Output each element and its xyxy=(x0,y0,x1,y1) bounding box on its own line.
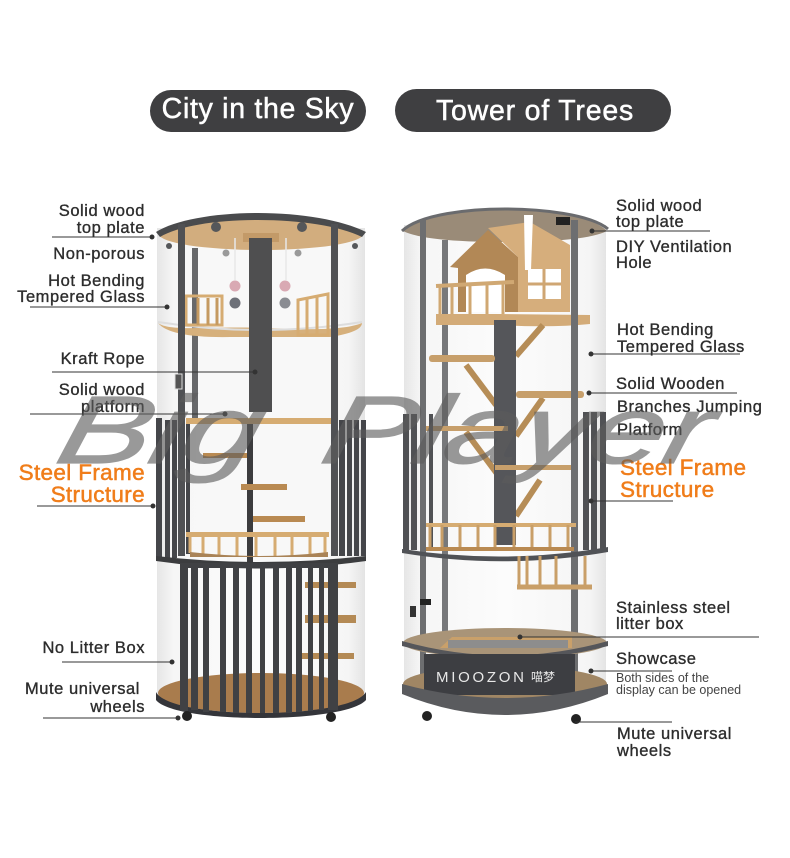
litter box tray xyxy=(402,628,608,660)
callout: ventilation: Hole xyxy=(616,254,652,272)
callout: top plate xyxy=(590,197,710,234)
callout: wheels xyxy=(25,680,180,720)
callout: top plate: top plate xyxy=(77,219,145,237)
frame ring xyxy=(402,547,608,561)
base xyxy=(156,673,366,718)
callout: showcase: Showcase xyxy=(616,650,697,668)
callout: branches: Platform xyxy=(617,421,683,439)
callout: no litter box: No Litter Box xyxy=(42,639,145,657)
brand name: MIOOZON xyxy=(436,669,524,686)
callout: platform: platform xyxy=(81,398,145,416)
callout: wheels: Mute universal xyxy=(617,725,732,743)
callout: wheels: wheels xyxy=(89,698,145,716)
watermark: Big xyxy=(48,376,276,484)
title pill: City in the Sky: City in the Sky xyxy=(162,93,354,125)
product: City in the Sky cat tower xyxy=(156,213,366,722)
callout: non-porous glass: Hot Bending xyxy=(48,272,145,290)
door posts xyxy=(178,224,185,556)
upper platform xyxy=(158,294,362,337)
wheels xyxy=(182,711,336,722)
top plate xyxy=(156,213,366,256)
callout: branches xyxy=(586,375,762,439)
callout: no litter box xyxy=(42,639,174,664)
middle band xyxy=(156,556,366,568)
kraft rope post xyxy=(249,238,272,412)
callout: top plate xyxy=(52,202,154,240)
wooden railing xyxy=(426,523,576,551)
title pill: Tower of Trees xyxy=(395,89,671,132)
callout: wheels: Mute universal xyxy=(25,680,140,698)
hanging perch xyxy=(517,556,592,587)
watermark: Player xyxy=(313,377,731,484)
branch platforms xyxy=(425,355,584,470)
callout: steel frame: Structure xyxy=(620,477,714,502)
wheels xyxy=(422,711,581,724)
callout: ventilation: DIY Ventilation xyxy=(616,238,732,256)
callout: litter box xyxy=(518,599,759,640)
callout: litter box: Stainless steel xyxy=(616,599,731,617)
watermark xyxy=(48,376,731,484)
right callouts xyxy=(518,197,762,760)
top plate xyxy=(402,209,608,242)
wooden cat house xyxy=(436,215,590,326)
callout: branches: Solid Wooden xyxy=(616,375,725,393)
showcase base: 喵梦 xyxy=(531,670,555,684)
callout: wheels: wheels xyxy=(616,742,672,760)
callout: non-porous glass: Non-porous xyxy=(53,245,145,263)
product: Tower of Trees cat tower xyxy=(402,209,608,724)
lower post and steps xyxy=(186,418,331,564)
callout: steel frame xyxy=(19,460,156,508)
back posts xyxy=(192,248,198,418)
callout: platform xyxy=(30,381,228,416)
title pill: City in the Sky xyxy=(150,90,366,132)
tree trunk post xyxy=(494,320,516,545)
callout: top plate: Solid wood xyxy=(59,202,145,220)
left callouts xyxy=(17,202,258,720)
callout: kraft rope: Kraft Rope xyxy=(61,350,145,368)
callout: non-porous glass xyxy=(17,245,170,310)
steel frame bars xyxy=(403,412,606,550)
lower cage bars xyxy=(180,563,338,713)
callout: glass: Hot Bending xyxy=(617,321,714,339)
callout: glass: Tempered Glass xyxy=(617,338,745,356)
glass cylinder xyxy=(404,225,606,695)
callout: branches: Branches Jumping xyxy=(617,398,762,416)
door lock xyxy=(410,599,431,617)
callout: showcase xyxy=(588,650,741,697)
callout: litter box: litter box xyxy=(616,615,684,633)
showcase base xyxy=(402,654,608,715)
callout: steel frame xyxy=(588,455,746,504)
callout: top plate: Solid wood xyxy=(616,197,702,215)
callout: showcase: Both sides of the xyxy=(616,671,709,685)
callout: showcase: display can be opened xyxy=(616,683,741,697)
callout: steel frame: Structure xyxy=(51,482,145,507)
back post xyxy=(442,240,448,640)
glass cylinder xyxy=(157,228,365,698)
callout: steel frame: Steel Frame xyxy=(620,455,746,480)
white light strip xyxy=(524,215,533,270)
callout: wheels xyxy=(575,722,732,760)
upper steel frame bars xyxy=(156,418,366,558)
callout: platform: Solid wood xyxy=(59,381,145,399)
lower steps xyxy=(300,582,356,659)
branches xyxy=(466,325,543,516)
title pill: Tower of Trees: Tower of Trees xyxy=(436,95,634,127)
callout: glass xyxy=(588,321,745,356)
callout: top plate: top plate xyxy=(616,213,684,231)
hanging balls xyxy=(230,238,290,308)
wooden railing xyxy=(186,532,329,557)
callout: steel frame: Steel Frame xyxy=(19,460,145,485)
callout: non-porous glass: Tempered Glass xyxy=(17,288,145,306)
front posts xyxy=(420,220,426,690)
callout: kraft rope xyxy=(52,350,258,374)
door hinge xyxy=(175,374,182,389)
